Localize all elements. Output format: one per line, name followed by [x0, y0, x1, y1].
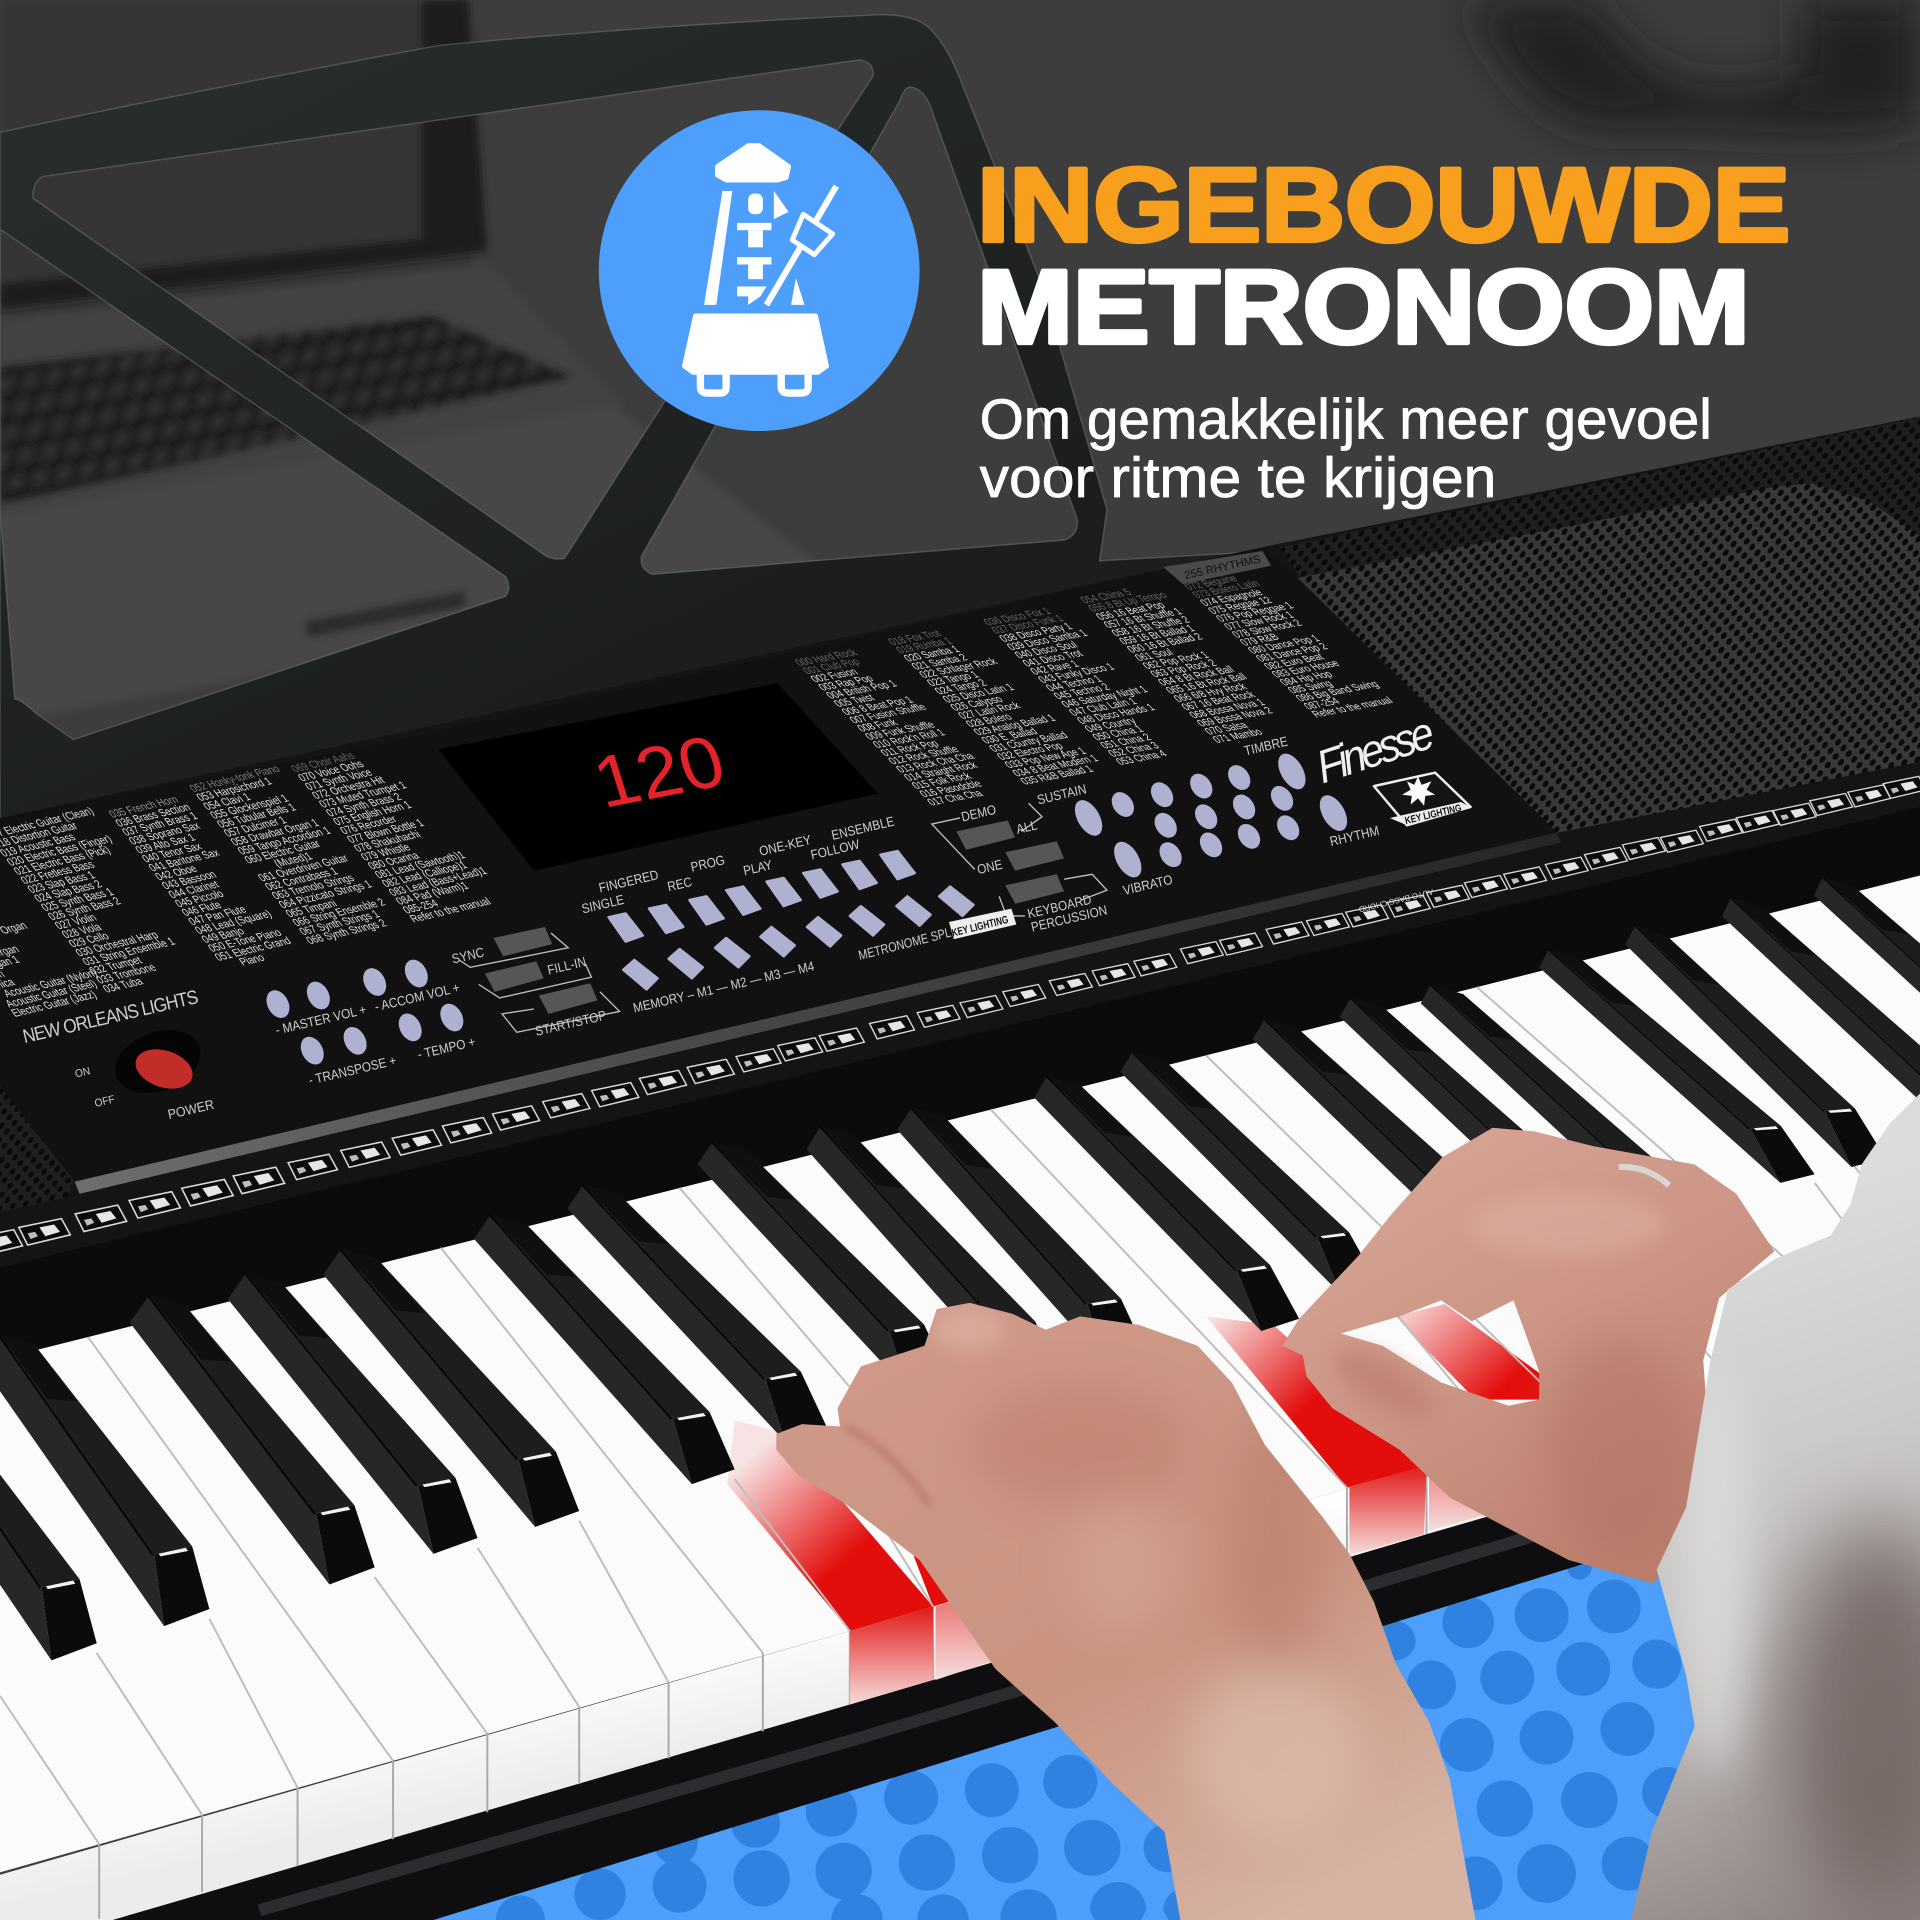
music stand — [0, 15, 1273, 869]
rhythm column 4: 055 8 Bt Up Tempo — [1086, 590, 1170, 614]
rhythm column 3: 037 Disco Funk 1 — [989, 613, 1067, 636]
panel labels: VIBRATO — [1121, 872, 1174, 898]
panel labels: FILL-IN — [546, 954, 587, 978]
column 017-034: 023 Slap Bass 1 — [25, 869, 98, 896]
panel labels: - TRANSPOSE + — [307, 1053, 398, 1088]
rhythm column 5: 084 Hip Hop — [1277, 669, 1336, 688]
column 035-051: Piano — [237, 952, 268, 968]
column 017-034: 019 Acoustic Bass — [0, 831, 79, 860]
panel labels: - ACCOM VOL + — [373, 980, 461, 1015]
panel labels: ONE-KEY — [758, 832, 813, 859]
panel labels: MEMORY – M1 — M2 — M3 — M4 — [632, 959, 816, 1016]
display — [438, 683, 878, 871]
panel labels: PLAY — [742, 857, 774, 879]
column 069-085: 069 Choir Aahs — [289, 750, 358, 775]
column 017-034: 028 Viola — [59, 921, 105, 941]
rhythm column 2: 029 Analog Ballad 1 — [971, 713, 1059, 738]
column 052-068: 064 Pizzicato Strings 1 — [276, 879, 375, 911]
column 017-034: 025 Synth Bass 1 — [39, 886, 117, 914]
column 052-068: 063 Tremolo Strings — [270, 872, 358, 902]
rhythm column 5: 074 Espagnole — [1198, 587, 1266, 609]
rhythm column 3: 041 Disco Trot — [1020, 648, 1086, 669]
column 017-034: 031 String Ensemble 1 — [80, 936, 178, 968]
rhythm column 5: 086 Big Band Swing — [1293, 679, 1382, 704]
sleeve — [1631, 1093, 1920, 1920]
column 017-034: 027 Violin — [53, 912, 100, 932]
speaker grille — [1280, 416, 1920, 833]
panel labels: ALL — [1015, 818, 1039, 837]
rhythm column 1: 007 Fusion Shuffle — [847, 702, 930, 726]
keypad — [1069, 749, 1353, 882]
column 069-085: 083 Lead (Bass+Lead)1 — [386, 865, 490, 899]
rhythm column 3: 045 Techno 2 — [1051, 682, 1113, 702]
column 035-051: 042 Oboe — [153, 863, 200, 883]
column 017-034: 033 Trombone — [94, 962, 159, 986]
rhythm column 4: 071 Mambo — [1210, 727, 1266, 746]
rhythm column 5: 076 Pop Reggae 1 — [1214, 601, 1297, 624]
panel labels: DEMO — [960, 802, 998, 825]
column 069-085: 076 Recorder — [338, 813, 400, 837]
column 069-085: 074 Synth Brass 2 — [324, 791, 405, 819]
rhythm column 4: 058 16 Bt Shuffle 2 — [1109, 615, 1193, 639]
column 069-085: 071 Synth Voice — [303, 767, 375, 793]
column 052-068: 055 Glockenspiel 1 — [208, 793, 292, 822]
panel labels: OFF — [93, 1093, 117, 1110]
panel labels: ONE — [976, 857, 1004, 877]
rhythm column 4: 056 16 Beat Pop — [1093, 600, 1168, 623]
subtitle — [980, 387, 1712, 509]
rhythm column 5: 082 Euro Beat — [1261, 652, 1327, 672]
column 035-051: 051 Electric Grand — [212, 935, 294, 964]
rhythm column 1: 008 Funk — [855, 717, 901, 734]
rhythm column 2: 034 8 Beat Modern 1 — [1010, 753, 1102, 779]
Finesse logo: Finesse — [1311, 707, 1440, 794]
key lighting badge: KEY LIGHTING — [1404, 802, 1462, 826]
rhythm column 5: 079 R&B — [1237, 632, 1282, 648]
rhythm column 3: 053 China 4 — [1113, 748, 1170, 768]
rhythm column 4: 061 Soul — [1132, 647, 1176, 664]
rhythm column 2: 023 Tango 1 — [924, 669, 982, 689]
panel labels: SYNC — [450, 945, 486, 967]
rhythm column 1: 000 Hard Rock — [792, 647, 861, 669]
panel labels: ON — [74, 1065, 91, 1081]
rhythm column 4: 068 Bossa Nova 1 — [1187, 697, 1268, 721]
column 052-068: 062 Contrabass 1 — [263, 866, 341, 893]
rhythm column 1: 012 Rock Shuffle — [886, 744, 962, 767]
rhythm column 3: 051 China 2 — [1098, 732, 1155, 751]
column 052-068: 066 String Ensemble 2 — [290, 897, 388, 929]
rhythm column 5: 073 Bolero Latin — [1190, 578, 1263, 601]
column 017-034: 030 Orchestral Harp — [73, 929, 161, 959]
column 017-034: 032 Trumpet — [87, 955, 145, 977]
column 052-068: 058 Drawbar Organ 1 — [228, 817, 322, 849]
panel labels: KEYBOARD — [1026, 892, 1093, 921]
red lit key 1 — [727, 1408, 1016, 1631]
rhythm column 1: 003 Rap Pop — [816, 673, 877, 693]
rhythm column 2: 033 Pop New Age 1 — [1002, 746, 1089, 771]
red lit key 2 — [1206, 1316, 1427, 1488]
column 017-034: 024 Slap Bass 2 — [32, 879, 105, 905]
rhythm column 3: 050 China 1 — [1090, 724, 1147, 743]
icon strip: AUTO BASS CHORD — [1358, 887, 1434, 914]
panel labels: PROG — [689, 853, 726, 875]
rhythm column 3: 038 Disco Party 1 — [997, 621, 1076, 645]
white keys top surface — [0, 876, 1920, 1873]
left hand — [776, 1303, 1476, 1920]
rhythm column 2: 022 Schlager Rock — [917, 656, 1001, 681]
rhythm column 3: 040 Disco Soul — [1012, 640, 1081, 661]
column 052-068: 060 Electric Guitar — [242, 838, 324, 866]
gray function buttons — [485, 820, 1064, 1014]
rhythm column 1: 013 Rock Cha Cha — [894, 751, 978, 775]
panel labels: FINGERED — [597, 867, 660, 896]
rhythm column 4: 065 16 Bt Rock Ball — [1163, 671, 1250, 696]
rhythm column 1: 010 Rock'n Roll 1 — [870, 727, 948, 751]
rhythm column 2: 032 Electro Pop — [994, 741, 1067, 763]
rhythm column 4: 066 6/8 Hvy Rock — [1171, 681, 1251, 705]
column 052-068: 054 Clavi 1 — [201, 791, 254, 813]
rhythm column 2: 035 R&B Ballad 1 — [1018, 764, 1097, 787]
power switch — [106, 1019, 209, 1104]
column 017-034: 022 Fretless Bass — [18, 859, 98, 887]
column 0: Acoustic Guitar (Steel) — [3, 978, 100, 1010]
rhythm column 2: 028 Bolero — [963, 712, 1015, 730]
column 017-034: 020 Electric Bass (Finger) — [5, 833, 115, 869]
right hand — [1282, 1128, 1774, 1583]
rhythm column 4: 070 Salsa — [1202, 720, 1252, 737]
column 035-051: 044 Clarinet — [166, 879, 222, 901]
column 035-051: 046 Flute — [179, 899, 224, 919]
panel labels: - TEMPO + — [416, 1034, 477, 1062]
panel labels: TIMBRE — [1243, 734, 1289, 759]
panel labels: SINGLE — [580, 892, 626, 917]
column 035-051: 049 Banjo — [199, 925, 247, 946]
rhythm column 3: 042 Rave 1 — [1028, 659, 1082, 677]
rhythm column 1: 009 Funk Shuffle — [862, 720, 938, 742]
rhythm column 5: Refer to the manual — [1309, 695, 1396, 720]
column 069-085: 077 Blown Bottle 1 — [345, 817, 427, 846]
column 035-051: 035 French Horn — [107, 794, 181, 821]
column 069-085: 085-254 — [400, 898, 441, 916]
rhythm column 1: 005 Twist — [831, 692, 878, 710]
rhythm column 3: 036 Disco Fox 1 — [981, 606, 1054, 628]
column 069-085: 070 Voice Oohs — [296, 758, 367, 784]
panel labels: START/STOP — [534, 1008, 608, 1039]
column 035-051: 045 Piccolo — [173, 888, 227, 910]
panel labels: POWER — [166, 1096, 215, 1122]
icon: metronome in blue circle — [599, 110, 920, 431]
column 052-068: 053 Harpsichord 1 — [194, 776, 275, 804]
column 052-068: 059 Tango Accordion 1 — [235, 825, 334, 858]
column 052-068: 052 Honky-tonk Piano — [187, 763, 283, 795]
255 rhythms tag — [1163, 551, 1271, 584]
rhythm column 2: 024 Tango 2 — [932, 678, 990, 697]
white key fronts — [0, 1324, 1920, 1920]
left small speaker — [0, 1086, 75, 1212]
column 035-051: 050 E-Tone Piano — [206, 927, 284, 955]
rhythm column 4: 054 China 5 — [1078, 587, 1135, 606]
rhythm column 3: 049 Country — [1082, 715, 1140, 735]
column 035-051: 037 Synth Brass 1 — [120, 810, 200, 839]
rhythm column 4: 069 Bossa Nova 2 — [1194, 705, 1276, 729]
tempo readout: 120 — [584, 720, 734, 824]
rhythm column 1: 001 Club Pop — [800, 656, 863, 677]
icon strip — [0, 769, 1920, 1267]
rhythm column 1: 014 Straight Rock — [901, 760, 981, 783]
rhythm column 1: 016 Pasodoble — [917, 779, 985, 800]
column 069-085: 081 Lead (Sawtooth)1 — [373, 850, 468, 881]
rhythm column 4: 062 Pop Rock 1 — [1140, 650, 1212, 672]
panel labels — [21, 734, 1381, 1122]
keyboard body — [0, 416, 1920, 1371]
rhythm list — [792, 551, 1398, 808]
rhythm column 4: 057 16 Bt Shuffle 1 — [1101, 606, 1185, 631]
keyboard rail — [73, 1484, 1604, 1920]
blue dotted background — [367, 1555, 1727, 1920]
subtitle: voor ritme te krijgen — [980, 446, 1496, 509]
panel labels: FOLLOW — [809, 837, 861, 863]
panel labels: PERCUSSION — [1030, 903, 1109, 935]
rhythm column 5: 077 Slow Rock 1 — [1221, 610, 1297, 632]
rhythm column 5: 078 Slow Rock 2 — [1229, 618, 1305, 640]
rhythm column 2: 031 Country Ballad — [987, 730, 1071, 754]
rhythm column 1: 015 Folk Rock — [909, 771, 975, 792]
panel labels: ENSEMBLE — [830, 814, 896, 843]
control panel — [0, 547, 1556, 1182]
panel labels: METRONOME SPLIT — [857, 922, 962, 963]
column 017-034: 034 Tuba — [101, 976, 147, 996]
subtitle: Om gemakkelijk meer gevoel — [980, 387, 1712, 450]
title — [977, 147, 1790, 366]
column 069-085: 082 Lead (Calliope)1 — [379, 860, 470, 890]
rhythm column 5: 072 Beguine — [1182, 573, 1241, 593]
column 035-051: 036 Brass Section — [113, 801, 193, 830]
heading line 2: METRONOOM — [977, 249, 1750, 366]
rhythm column 5: 080 Dance Pop 1 — [1245, 633, 1323, 656]
rhythm column 3: 044 Techno 1 — [1043, 674, 1105, 694]
rhythm column 4: 060 16 Bt Ballad 2 — [1124, 631, 1206, 655]
rhythm column 2: 030 E_Ballad — [979, 726, 1041, 746]
panel labels: REC — [666, 874, 693, 895]
column 017-034: 026 Synth Bass 2 — [46, 895, 124, 923]
column 069-085: 073 Muted Trumpet 1 — [317, 780, 410, 811]
column 052-068: (Muted)1 — [272, 851, 315, 870]
rhythm column 1: 004 British Pop 1 — [824, 678, 900, 701]
voice list — [0, 742, 511, 1021]
255 rhythms tag: 255 RHYTHMS — [1183, 554, 1262, 582]
key lighting badge — [1374, 773, 1471, 826]
column 035-051: 039 Alto Sax 1 — [133, 832, 198, 856]
column 069-085: 078 Shakuhachi — [352, 829, 424, 855]
rhythm column 2: 027 Latin Rock — [956, 700, 1024, 722]
column 052-068: 057 Dulcimer 1 — [222, 815, 290, 840]
column 035-051: 041 Baritone Sax — [146, 847, 223, 874]
column 035-051: 038 Soprano Sax — [126, 820, 204, 848]
rhythm column 2: 018 Fox Trot — [886, 628, 944, 648]
rhythm column 3: 046 Saturday Night 1 — [1059, 684, 1151, 710]
column 017-034: 021 Electric Bass (Pick) — [11, 844, 113, 878]
button group brackets — [459, 803, 1107, 1032]
column 0: Acoustic Guitar (Nylon) — [1, 967, 100, 1000]
rhythm column 1: 011 Rock Pop — [878, 738, 942, 759]
ring — [1619, 1167, 1669, 1185]
memory buttons row — [623, 887, 973, 989]
column 069-085: 072 Orchestra Hit — [310, 774, 388, 802]
rhythm column 3: 039 Disco Samba 1 — [1004, 628, 1091, 653]
rhythm column 3: 052 China 3 — [1105, 740, 1162, 759]
rhythm column 3: 043 Funky Disco 1 — [1035, 662, 1118, 686]
column 069-085: 075 English Horn 1 — [331, 799, 415, 828]
rhythm column 2: 019 Rumba 1 — [893, 636, 956, 656]
rhythm column 3: 047 Club Latin 1 — [1067, 696, 1140, 718]
column 035-051: 040 Tenor Sax — [140, 841, 205, 865]
column 069-085: Refer to the manual — [407, 896, 494, 925]
column 069-085: 080 Ocarina — [366, 850, 423, 872]
rhythm column 5: 075 Reggae 12 — [1206, 595, 1276, 617]
tab buttons row — [609, 851, 915, 942]
key lighting small label: KEY LIGHTING — [951, 914, 1010, 940]
rhythm column 3: 048 Disco Hands 1 — [1074, 702, 1158, 727]
rhythm column 2: 020 Samba 1 — [901, 644, 963, 664]
black keys — [0, 869, 1920, 1663]
area behind keys — [0, 807, 1920, 1378]
rhythm column 2: 026 Calypso — [948, 694, 1006, 713]
rhythm column 5: 087-254 — [1301, 696, 1343, 712]
rhythm column 4: 059 16 Bt Ballad 1 — [1117, 623, 1198, 647]
panel lip — [75, 833, 1561, 1194]
column 069-085: 079 Whistle — [359, 842, 413, 863]
rhythm column 1: 006 8 Beat Pop 1 — [839, 695, 917, 718]
panel labels: SUSTAIN — [1036, 782, 1088, 808]
column 052-068: 061 Overdriven Guitar — [256, 853, 352, 884]
column 052-068: 065 Timpani — [283, 898, 340, 920]
rhythm column 2: 025 Disco Latin 1 — [940, 682, 1017, 705]
column 035-051: 047 Pan Flute — [186, 904, 249, 928]
oval volume and tempo buttons — [262, 956, 468, 1068]
rhythm column 5: 085 Swing — [1285, 678, 1336, 696]
column 017-034: 029 Cello — [66, 930, 112, 950]
rhythm column 4: 064 8 Bt Rock Ball — [1156, 664, 1237, 688]
rhythm column 2: 021 Samba 2 — [909, 652, 971, 672]
panel labels: NEW ORLEANS LIGHTS — [21, 985, 200, 1047]
panel labels: RHYTHM — [1328, 823, 1381, 849]
rhythm column 4: 063 Pop Rock 2 — [1148, 658, 1220, 680]
rhythm column 1: 017 Cha Cha — [925, 788, 987, 808]
red lit key 3 — [1396, 1304, 1540, 1400]
rhythm column 1: 002 Fusion — [808, 667, 861, 685]
column 052-068: 056 Tubular Bells 1 — [215, 802, 299, 831]
heading line 1: INGEBOUWDE — [977, 147, 1790, 264]
panel labels: - MASTER VOL + — [274, 1002, 368, 1038]
column 0: Electric Guitar (Jazz) — [9, 989, 100, 1020]
column 035-051: 048 Lead (Square) — [193, 908, 275, 937]
column 052-068: 068 Synth Strings 2 — [304, 918, 390, 947]
rhythm column 5: 081 Dance Pop 2 — [1253, 641, 1331, 664]
column 069-085: 084 Pad (Warm)1 — [393, 880, 472, 908]
column 052-068: 067 Synth Strings 1 — [297, 909, 383, 938]
rhythm column 5: 083 Euro House — [1269, 658, 1343, 680]
white key dividers — [0, 939, 1920, 1844]
column 035-051: 043 Bassoon — [159, 869, 219, 892]
rhythm column 4: 067 16 Beat Rock — [1179, 689, 1259, 713]
